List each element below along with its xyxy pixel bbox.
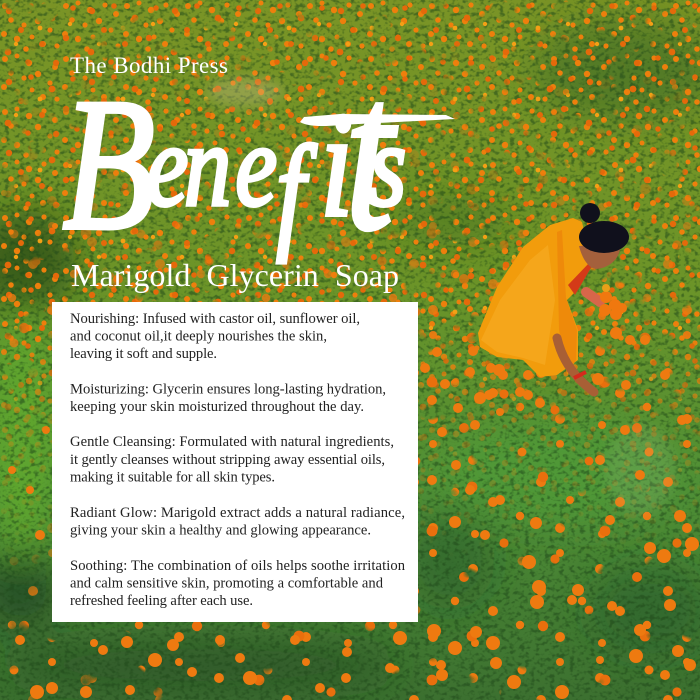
title: Benefits [62,33,455,277]
text block: moisturizing: keeping your skin moisturized throughout the day. [70,399,364,415]
text block: gentle cleansing: making it suitable for all skin types. [70,470,275,486]
text block: soothing: and calm sensitive skin, promoting a comfortable and [70,576,384,592]
text block: nourishing: Nourishing: Infused with castor oil, sunflower oil, [70,311,360,327]
title: Benefits: n [184,101,231,232]
text block: gentle cleansing: Gentle Cleansing: Formulated with natural ingredients, [70,434,394,450]
flowers held in hand [599,284,627,320]
text block: nourishing: and coconut oil,it deeply nourishes the skin, [70,328,327,344]
face [579,243,620,269]
marigold flowers: large foreground blooms [8,327,699,699]
publisher name: The Bodhi Press [70,53,228,78]
raised arm and hand [586,292,600,302]
subtitle: Marigold Glycerin Soap [71,257,399,293]
text block: radiant glow: Radiant Glow: Marigold extract adds a natural radiance, [70,505,405,521]
title: Benefits: i [320,82,353,248]
title: Benefits: B [62,60,155,270]
text block: gentle cleansing: it gently cleanses without stripping away essential oils, [70,452,385,468]
title: Benefits: f [276,120,318,264]
hair [579,221,629,253]
title: Benefits: e [235,101,277,232]
text block: radiant glow: giving your skin a healthy and glowing appearance. [70,522,371,538]
saree [478,218,592,377]
panel: benefits list [52,302,418,622]
lowered arm [557,338,594,392]
text block: moisturizing: Moisturizing: Glycerin ensures long-lasting hydration, [70,382,386,398]
title: Benefits: s [370,101,406,232]
title: t crossbar brush stroke [300,114,455,126]
hair bun [580,203,600,223]
woman picking marigolds [478,203,629,392]
text block: soothing: Soothing: The combination of oils helps soothe irritation [70,558,406,574]
title: Benefits: t [345,33,398,277]
text block: soothing: refreshed feeling after each use. [70,593,253,609]
title: Benefits: e [146,101,188,232]
text block: nourishing: leaving it soft and supple. [70,346,217,362]
